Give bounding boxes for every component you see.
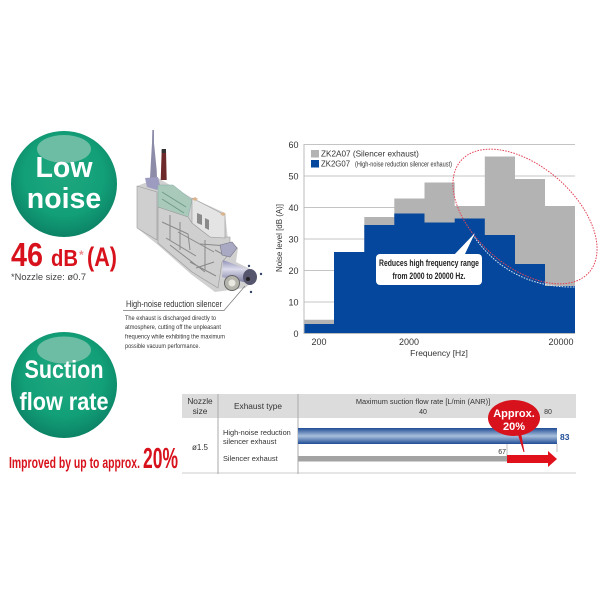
x axis labels: 20000 xyxy=(548,337,574,347)
callout: reduces high frequency range: Reduces high frequency range xyxy=(379,258,479,268)
callout heading: silencer xyxy=(123,286,245,310)
improvement statement: 20% xyxy=(143,443,178,475)
x axis labels xyxy=(311,337,574,347)
y axis labels: 0 xyxy=(293,329,298,339)
callout: reduces high frequency range: from 2000 to 20000 Hz. xyxy=(392,271,466,281)
legend: (High-noise reduction silencer exhaust) xyxy=(355,162,452,168)
noise value 46 dB(A) xyxy=(11,236,117,273)
callout: approx 20%: Approx. xyxy=(493,408,535,420)
legend xyxy=(311,150,452,168)
badge: Low noise: Low xyxy=(36,152,93,184)
table: suction flow rate: size xyxy=(193,406,208,416)
silencer description: atmosphere, cutting off the unpleasant xyxy=(125,324,221,331)
badge: Suction flow rate: Suction xyxy=(24,356,104,384)
badge: Suction flow rate: flow rate xyxy=(20,388,109,416)
table: suction flow rate: ø1.5 xyxy=(192,443,209,452)
y axis labels: 10 xyxy=(288,298,298,308)
noise value 46 dB(A): 46 xyxy=(11,236,43,273)
product illustration: vacuum ejector xyxy=(137,130,262,293)
noise value 46 dB(A): dB xyxy=(51,245,78,271)
table: suction flow rate: 80 xyxy=(544,409,552,416)
callout heading: silencer: High-noise reduction silencer xyxy=(126,299,222,309)
y axis labels: 60 xyxy=(288,140,298,150)
noise value 46 dB(A): * xyxy=(79,248,84,262)
gray series: ZK2A07 xyxy=(304,156,575,334)
x axis labels: 2000 xyxy=(399,337,419,347)
table: suction flow rate: silencer exhaust xyxy=(223,437,276,446)
improvement statement xyxy=(9,443,178,475)
badge: Low noise xyxy=(11,131,117,237)
table header xyxy=(182,394,576,418)
blue series: ZK2G07 xyxy=(304,214,575,334)
silencer description: The exhaust is discharged directly to xyxy=(125,315,216,322)
blue bar: 83: 83 xyxy=(560,432,570,442)
table: suction flow rate: Silencer exhaust xyxy=(223,454,278,463)
gray bar: 67: 67 xyxy=(498,449,506,456)
x axis labels: 200 xyxy=(311,337,327,347)
highlighted ellipse xyxy=(428,123,600,310)
table: suction flow rate xyxy=(182,394,576,474)
legend: ZK2G07 xyxy=(321,160,350,168)
gray bar: 67 xyxy=(298,449,507,462)
y axis labels: 50 xyxy=(288,172,298,182)
blue bar: 83 xyxy=(298,428,570,444)
noise value 46 dB(A): (A) xyxy=(87,242,117,272)
x axis title: Frequency [Hz] xyxy=(410,348,468,358)
callout: approx 20%: 20% xyxy=(503,421,525,433)
table: suction flow rate: Nozzle xyxy=(187,396,213,406)
legend: ZK2A07 (Silencer exhaust) xyxy=(321,150,419,158)
y axis labels: 20 xyxy=(288,266,298,276)
callout: reduces high frequency range xyxy=(376,233,482,285)
silencer description xyxy=(125,315,225,350)
silencer description: possible vacuum performance. xyxy=(125,343,200,350)
table: suction flow rate: Maximum suction flow rate [L/min (ANR)] xyxy=(356,397,490,406)
callout: approx 20% xyxy=(488,400,540,452)
improvement statement: Improved by up to approx. xyxy=(9,455,140,472)
y axis labels: 40 xyxy=(288,203,298,213)
y axis labels xyxy=(288,140,298,339)
red arrow xyxy=(507,451,557,467)
table: suction flow rate: High-noise reduction xyxy=(223,428,291,437)
y axis title: Noise level [dB (A)] xyxy=(275,204,284,272)
silencer description: frequency while exhibiting the maximum xyxy=(125,334,225,340)
bar chart: noise level by frequency xyxy=(275,123,600,358)
table: suction flow rate: 40 xyxy=(419,409,427,416)
badge: Suction flow rate xyxy=(11,332,117,438)
table: suction flow rate: Exhaust type xyxy=(234,401,282,411)
badge: Low noise: noise xyxy=(27,183,101,215)
y axis labels: 30 xyxy=(288,234,298,244)
nozzle size note: *Nozzle size: ø0.7 xyxy=(11,272,86,282)
